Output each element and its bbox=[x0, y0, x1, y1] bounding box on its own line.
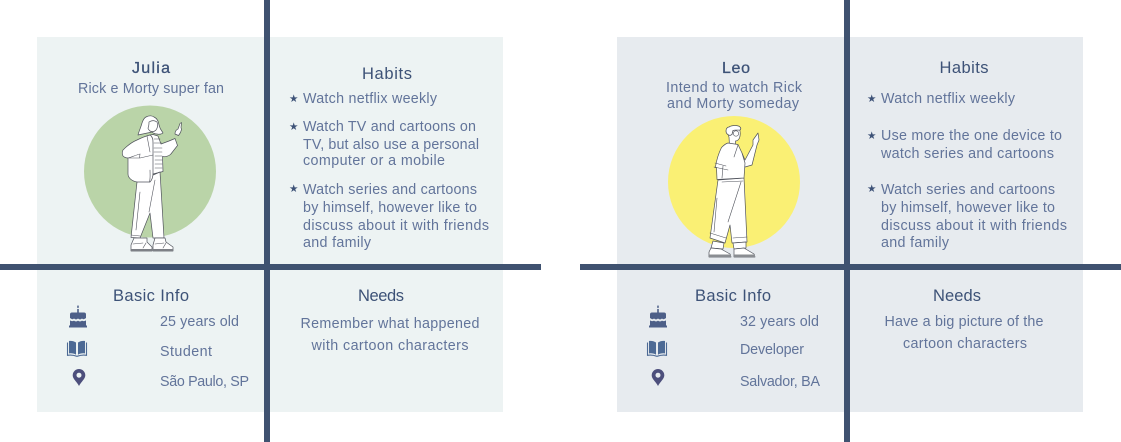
text block: Julia habits: Habits bbox=[362, 65, 412, 83]
illustration circle: Julia bbox=[84, 106, 216, 238]
text block: Leo needs bbox=[884, 287, 1044, 352]
illustration: Leo figure bbox=[709, 126, 759, 257]
title: Julia name and tagline bbox=[78, 60, 224, 97]
text block: Julia basic info bbox=[68, 287, 249, 390]
icon: birthday cake bbox=[69, 305, 87, 328]
text block: Julia habits: TV, but also use a personal bbox=[303, 137, 479, 153]
text block: Julia basic info: Basic Info bbox=[113, 287, 189, 305]
text block: Leo habits: Use more the one device to bbox=[881, 128, 1062, 144]
text block: Julia habits: Watch netflix weekly bbox=[303, 91, 438, 107]
text block: Julia habits: Watch series and cartoons bbox=[303, 182, 477, 198]
icon: location pin bbox=[73, 369, 85, 386]
text block: Leo needs: Have a big picture of the bbox=[884, 314, 1044, 330]
icon: birthday cake bbox=[649, 305, 667, 328]
text block: Julia needs: Remember what happened bbox=[300, 316, 480, 332]
text block: Leo habits: ★ bbox=[867, 183, 876, 195]
text block: Julia habits: ★ bbox=[289, 121, 298, 133]
text block: Leo habits: Habits bbox=[940, 59, 988, 77]
text block: Julia habits: by himself, however like to bbox=[303, 200, 477, 216]
text block: Leo habits: by himself, however like to bbox=[881, 200, 1055, 216]
text block: Leo habits: ★ bbox=[867, 93, 876, 105]
text block: Leo basic info: 32 years old bbox=[740, 314, 819, 330]
text block: Leo habits: discuss about it with friends bbox=[881, 218, 1067, 234]
text block: Julia habits: and family bbox=[303, 235, 372, 251]
title: Julia name and tagline: Rick e Morty super fan bbox=[78, 81, 224, 97]
text block: Julia habits: computer or a mobile bbox=[303, 153, 445, 169]
text block: Julia habits: discuss about it with friends bbox=[303, 218, 489, 234]
text block: Leo habits: ★ bbox=[867, 130, 876, 142]
text block: Leo habits: watch series and cartoons bbox=[880, 146, 1054, 162]
text block: Leo basic info: Salvador, BA bbox=[740, 374, 820, 390]
text block: Julia basic info: Student bbox=[160, 344, 212, 360]
text block: Julia habits bbox=[289, 65, 489, 251]
panel: Leo persona background bbox=[617, 37, 1083, 412]
text block: Leo needs: Needs bbox=[933, 287, 981, 305]
text block: Julia needs: with cartoon characters bbox=[310, 338, 468, 354]
axis lines: Leo quadrant bbox=[580, 0, 1121, 442]
axis lines: Julia quadrant bbox=[0, 0, 541, 442]
text block: Julia habits: Watch TV and cartoons on bbox=[303, 119, 476, 135]
text block: Julia basic info: São Paulo, SP bbox=[160, 374, 249, 390]
text block: Leo habits: Watch series and cartoons bbox=[881, 182, 1055, 198]
text block: Leo habits: and family bbox=[881, 235, 950, 251]
text block: Leo basic info: Basic Info bbox=[695, 287, 771, 305]
illustration circle: Leo bbox=[668, 116, 800, 248]
title: Leo name and tagline bbox=[666, 60, 803, 112]
icon: open book bbox=[68, 341, 86, 356]
icon: open book bbox=[648, 341, 666, 356]
text block: Julia needs: Needs bbox=[358, 287, 404, 305]
text block: Leo basic info bbox=[648, 287, 820, 390]
title: Leo name and tagline: Leo bbox=[722, 60, 750, 77]
panel: Julia persona background bbox=[37, 37, 503, 412]
text block: Julia basic info: 25 years old bbox=[160, 314, 239, 330]
text block: Leo habits bbox=[867, 59, 1067, 251]
title: Leo name and tagline: and Morty someday bbox=[667, 96, 800, 112]
icon: location pin bbox=[652, 369, 664, 386]
illustration: Julia figure bbox=[122, 116, 182, 251]
text block: Leo basic info: Developer bbox=[740, 342, 804, 358]
title: Julia name and tagline: Julia bbox=[132, 60, 170, 77]
text block: Julia needs bbox=[300, 287, 480, 354]
text block: Leo needs: cartoon characters bbox=[903, 336, 1027, 352]
text block: Julia habits: ★ bbox=[289, 183, 298, 195]
text block: Leo habits: Watch netflix weekly bbox=[881, 91, 1016, 107]
title: Leo name and tagline: Intend to watch Rick bbox=[666, 80, 803, 96]
text block: Julia habits: ★ bbox=[289, 93, 298, 105]
